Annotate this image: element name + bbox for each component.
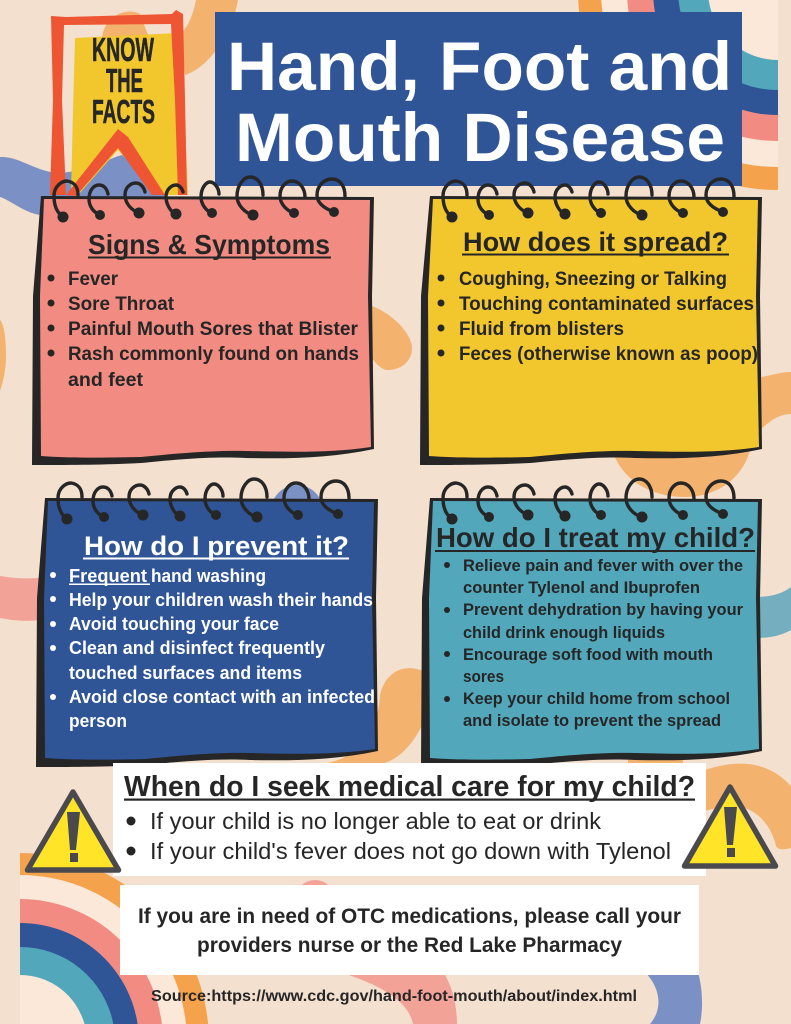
ribbon: know the facts — [50, 10, 188, 196]
bullet list: Sore Throat — [68, 294, 175, 315]
bullet list: Avoid touching your face — [69, 614, 279, 634]
ribbon label: FACTS — [92, 93, 155, 130]
bullet list: sores — [463, 668, 504, 686]
note shape — [36, 479, 378, 767]
title: Mouth Disease — [235, 99, 725, 176]
heading: How do I treat my child? — [436, 522, 755, 553]
ribbon label: THE — [106, 62, 143, 99]
bullet list: hand washing — [151, 566, 266, 586]
bullet list — [50, 566, 375, 731]
ribbon label: KNOW — [92, 31, 155, 68]
bullet list: Fever — [68, 269, 119, 290]
bullet list — [126, 808, 671, 864]
icon: warning triangle right — [684, 787, 776, 866]
ribbon red frame — [50, 10, 187, 195]
bullet list: Help your children wash their hands — [69, 590, 373, 610]
bullet list: Coughing, Sneezing or Talking — [459, 269, 727, 290]
decoration: top-right rainbow — [578, 0, 778, 190]
panel: how does it spread — [420, 177, 762, 465]
note shape — [421, 479, 762, 767]
bullet list: Feces (otherwise known as poop) — [459, 344, 758, 365]
bullet list: counter Tylenol and Ibuprofen — [463, 579, 700, 597]
title — [215, 12, 742, 186]
callout: OTC medications: providers nurse or the Red Lake Pharmacy — [197, 933, 622, 957]
bullet list: If your child is no longer able to eat or drink — [150, 808, 602, 834]
bullet list — [444, 557, 744, 730]
ribbon label — [92, 31, 155, 130]
panel: how do I prevent it — [36, 479, 378, 767]
bullet list — [48, 269, 359, 391]
panel: when to seek medical care — [113, 763, 706, 876]
bullet list: Rash commonly found on hands — [68, 344, 359, 365]
callout: OTC medications — [120, 885, 699, 975]
bullet list: child drink enough liquids — [463, 624, 665, 642]
bullet list: and isolate to prevent the spread — [463, 712, 721, 730]
bullet list: touched surfaces and items — [69, 663, 302, 683]
heading: How do I prevent it? — [84, 531, 349, 561]
bullet list: Touching contaminated surfaces — [459, 294, 754, 315]
bullet list: Frequent — [69, 566, 147, 586]
bullet list: person — [69, 711, 127, 731]
panel: signs and symptoms — [32, 177, 374, 465]
heading: Signs & Symptoms — [88, 229, 330, 260]
note shape — [420, 177, 762, 465]
heading: How does it spread? — [463, 227, 728, 257]
bullet list: and feet — [68, 370, 144, 391]
ribbon body — [71, 33, 188, 195]
bullet list: Keep your child home from school — [463, 690, 730, 708]
bullet list: Avoid close contact with an infected — [69, 687, 375, 707]
heading: When do I seek medical care for my child? — [124, 771, 695, 803]
bullet list: Clean and disinfect frequently — [69, 638, 325, 658]
panel: how do I treat my child — [421, 479, 762, 767]
title: Hand, Foot and — [227, 28, 732, 105]
bullet list: Encourage soft food with mouth — [463, 646, 713, 664]
bullet list: Painful Mouth Sores that Blister — [68, 319, 359, 340]
bullet list: If your child's fever does not go down with Tylenol — [150, 838, 671, 864]
callout: OTC medications: If you are in need of OTC medications, please call your — [138, 904, 682, 928]
bullet list: Prevent dehydration by having your — [463, 601, 744, 619]
icon: warning triangle left — [28, 792, 118, 870]
bullet list: Relieve pain and fever with over the — [463, 557, 743, 575]
bullet list: Fluid from blisters — [459, 319, 624, 340]
decoration: bottom-left rainbow — [20, 853, 208, 1024]
ribbon red chevron — [66, 129, 165, 196]
note shape — [32, 177, 374, 465]
bullet list — [438, 269, 758, 365]
source: Source:https://www.cdc.gov/hand-foot-mouth/about/index.html — [151, 988, 637, 1005]
